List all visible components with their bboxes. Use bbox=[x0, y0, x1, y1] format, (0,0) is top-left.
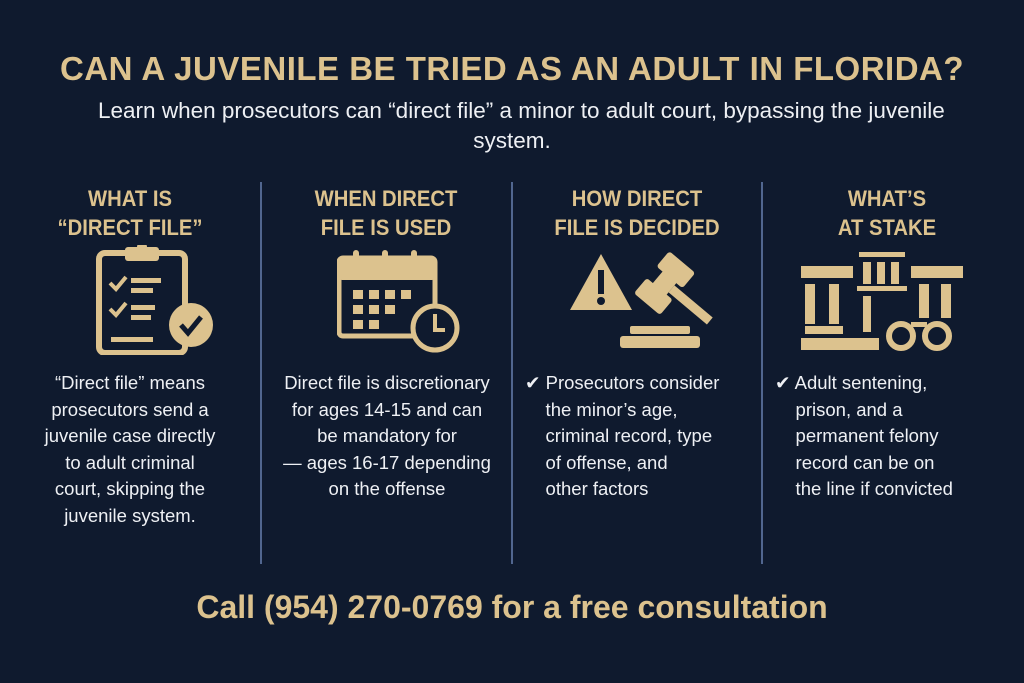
call to action: Call (954) 270-0769 for a free consultation bbox=[196, 589, 828, 625]
body text: ✔ Adult sentening, bbox=[775, 372, 927, 393]
panel: when direct file is used bbox=[283, 186, 491, 499]
body text: prison, and a bbox=[796, 398, 903, 420]
icon: warning and gavel bbox=[570, 252, 713, 348]
body text bbox=[525, 372, 720, 499]
body text: be mandatory for bbox=[317, 425, 457, 446]
heading bbox=[314, 186, 458, 240]
subtitle: Learn when prosecutors can “direct file” a minor to adult court, bypassing the juvenile bbox=[98, 98, 945, 123]
heading bbox=[57, 186, 203, 240]
heading bbox=[838, 186, 936, 240]
panel: what's at stake bbox=[775, 186, 963, 499]
title: CAN A JUVENILE BE TRIED AS AN ADULT IN FLORIDA? bbox=[60, 50, 964, 87]
body text bbox=[283, 372, 491, 499]
icon: courthouse and handcuffs bbox=[801, 252, 963, 351]
body text: the line if convicted bbox=[796, 478, 953, 499]
heading: HOW DIRECT bbox=[572, 186, 702, 211]
body text: — ages 16-17 depending bbox=[283, 452, 491, 472]
heading: FILE IS DECIDED bbox=[554, 215, 720, 240]
body text: prosecutors send a bbox=[51, 398, 209, 420]
body text: permanent felony bbox=[796, 425, 939, 446]
heading: WHEN DIRECT bbox=[315, 186, 457, 211]
body text: Direct file is discretionary bbox=[284, 372, 490, 393]
icon: clipboard bbox=[96, 245, 213, 355]
heading: WHAT IS bbox=[88, 186, 172, 211]
panel: how direct file is decided bbox=[525, 186, 720, 499]
heading: “DIRECT FILE” bbox=[57, 215, 203, 240]
heading: AT STAKE bbox=[838, 215, 936, 240]
subtitle bbox=[98, 98, 945, 153]
body text: ✔ Prosecutors consider bbox=[525, 372, 719, 393]
body text: criminal record, type bbox=[546, 425, 712, 446]
body text bbox=[775, 372, 953, 499]
body text: “Direct file” means bbox=[55, 372, 205, 393]
heading: WHAT’S bbox=[848, 186, 926, 211]
body text: of offense, and bbox=[546, 452, 668, 472]
heading bbox=[554, 186, 720, 240]
body text bbox=[44, 372, 216, 526]
icon: calendar bbox=[337, 250, 460, 352]
body text: to adult criminal bbox=[65, 452, 195, 472]
body text: the minor’s age, bbox=[546, 398, 678, 420]
body text: on the offense bbox=[329, 478, 445, 499]
body text: for ages 14-15 and can bbox=[292, 398, 482, 420]
body text: juvenile system. bbox=[64, 504, 196, 526]
body text: juvenile case directly bbox=[45, 425, 215, 446]
subtitle: system. bbox=[473, 128, 551, 153]
heading: FILE IS USED bbox=[321, 215, 451, 240]
body text: other factors bbox=[546, 478, 648, 499]
body text: court, skipping the bbox=[55, 478, 205, 499]
panel: what is direct file bbox=[44, 186, 216, 526]
body text: record can be on bbox=[796, 452, 934, 472]
